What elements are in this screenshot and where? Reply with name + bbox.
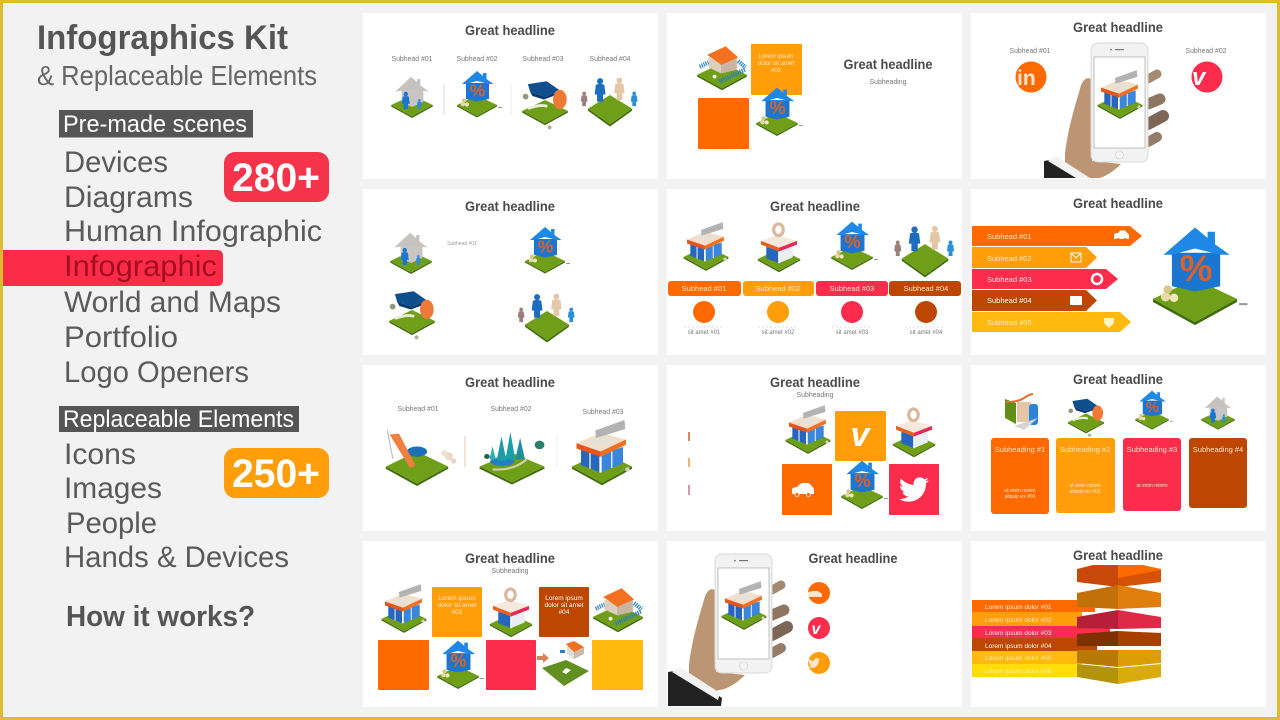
panel: slide row 1 column 1: Subhead #04 — [590, 54, 630, 63]
stacked bars: Lorem ipsum dolor #05 — [985, 655, 1052, 662]
list: replaceable elements — [64, 438, 289, 574]
arrow 3 with lifebuoy icon: Subhead #03 — [987, 275, 1032, 284]
list: replaceable elements: Hands & Devices — [64, 541, 289, 574]
scene: percent house — [831, 222, 878, 270]
panel: slide row 3 column 2 — [667, 365, 962, 531]
panel: slide row 4 column 1 — [363, 541, 658, 707]
scene: percent house — [525, 227, 570, 274]
panel: slide row 3 column 1: Great headline — [465, 374, 555, 390]
icon: vimeo circle: v — [812, 621, 822, 638]
badge: 250+: 250+ — [232, 452, 320, 496]
badge: 280+: 280+ — [232, 156, 320, 200]
card 1: aliquip ex #01 — [1005, 494, 1036, 500]
list: pre-made scenes: Portfolio — [64, 321, 178, 354]
stacked bars: Lorem ipsum dolor #04 — [985, 643, 1052, 650]
scene: shop — [572, 420, 632, 485]
tile: brown: dolor sit amet — [544, 602, 584, 609]
scene: shop — [786, 405, 830, 454]
stacked bars: Lorem ipsum dolor #03 — [985, 630, 1052, 637]
panel: slide row 1 column 2 — [667, 13, 962, 179]
column bars — [668, 281, 961, 296]
tile: twitter — [889, 464, 939, 515]
how it works link: How it works? — [66, 601, 255, 633]
tile: orange — [378, 640, 429, 690]
heading: pre-made scenes: Pre-made scenes — [63, 111, 247, 138]
arrow 4 with picture icon — [972, 290, 1097, 311]
phone in hand — [1044, 43, 1163, 195]
arrow 1 with car icon — [972, 226, 1142, 246]
card 3: Subheading #3 — [1127, 445, 1177, 454]
stacked bars — [972, 600, 1110, 677]
scene: people — [518, 294, 575, 342]
icon: linkedin circle — [1016, 62, 1046, 92]
list: pre-made scenes: Diagrams — [64, 181, 193, 214]
list: pre-made scenes: Devices — [64, 146, 168, 179]
scene: percent house — [1135, 391, 1173, 430]
icon: twitter circle — [808, 652, 830, 674]
list: pre-made scenes — [64, 146, 322, 389]
panel: slide row 3 column 3: Great headline — [1073, 371, 1163, 387]
stacked bars: Lorem ipsum dolor #02 — [985, 617, 1052, 624]
panel: slide row 4 column 2 — [667, 541, 962, 707]
panel: slide row 1 column 1 — [363, 13, 658, 179]
tile: amber: dolor sit amet — [437, 602, 477, 609]
square: amber: dolor sit amet — [758, 61, 794, 67]
panel: slide row 1 column 2: Subheading — [870, 77, 906, 86]
icon: vimeo circle — [1192, 62, 1222, 92]
panel: slide row 4 column 1: Subheading — [492, 566, 528, 575]
column captions: sit amet #02 — [762, 330, 795, 336]
scene: percent house — [841, 461, 888, 509]
tile: amber: Lorem ipsum — [438, 595, 476, 602]
panel: slide row 2 column 1: Great headline — [465, 198, 555, 214]
panel: slide row 2 column 1: Subhead #01 — [447, 241, 477, 247]
scene: shop — [382, 584, 426, 633]
panel: slide row 1 column 3: Subhead #01 — [1010, 46, 1050, 55]
card 1: Subheading #1 — [995, 445, 1045, 454]
square: amber: #02 — [771, 68, 782, 74]
column captions: sit amet #03 — [836, 330, 869, 336]
scene: percent house — [437, 641, 484, 689]
tile: car — [782, 464, 832, 515]
subtitle: & Replaceable Elements — [37, 60, 317, 91]
list: pre-made scenes: Logo Openers — [64, 356, 249, 389]
arrow 4 with picture icon: Subhead #04 — [987, 296, 1032, 305]
panel: slide row 1 column 3: Subhead #02 — [1186, 46, 1226, 55]
arrow 2 with envelope icon — [972, 247, 1097, 268]
panel: slide row 4 column 3: Great headline — [1073, 547, 1163, 563]
card 3: ut enim minim — [1136, 483, 1168, 489]
panel: slide row 2 column 1 — [363, 189, 658, 355]
panel: slide row 1 column 1: Great headline — [465, 22, 555, 38]
panel: slide row 1 column 1: Subhead #03 — [522, 54, 564, 63]
scene: house lot — [542, 641, 589, 686]
panel: slide row 2 column 2 — [667, 189, 962, 355]
scene: cottage — [593, 588, 643, 632]
scene: park — [480, 432, 544, 485]
card 1 — [991, 438, 1049, 514]
card 3 — [1123, 438, 1181, 511]
stacked bars: Lorem ipsum dolor #06 — [985, 668, 1052, 675]
scene: cottage — [697, 46, 747, 90]
square: orange — [698, 98, 749, 149]
panel: slide row 2 column 2: Great headline — [770, 198, 860, 214]
arrow 2 with envelope icon: Subhead #02 — [987, 254, 1032, 263]
list: replaceable elements: People — [66, 507, 157, 540]
arrow — [537, 653, 549, 663]
prism stack — [1077, 565, 1161, 684]
column bars: Subhead #04 — [904, 284, 948, 293]
tile: vimeo: v — [851, 416, 872, 454]
tile: brown: Lorem ipsum — [545, 595, 583, 602]
scene: people — [581, 78, 638, 126]
panel: slide row 1 column 3: Great headline — [1073, 19, 1163, 35]
panel: sidebar — [3, 19, 329, 633]
panel: slide row 3 column 3 — [971, 365, 1266, 531]
tile: vimeo — [835, 411, 886, 461]
icon: car circle — [808, 582, 830, 604]
scene: donut shop — [758, 224, 800, 272]
panel: slide row 4 column 3 — [971, 541, 1266, 707]
card 4 — [1189, 438, 1247, 508]
column captions — [684, 327, 945, 336]
list: pre-made scenes: World and Maps — [64, 286, 281, 319]
panel: slide row 1 column 2: Great headline — [844, 56, 933, 72]
card 2: aliquip ex #02 — [1070, 489, 1101, 495]
column bars: Subhead #02 — [756, 284, 800, 293]
square: amber — [751, 44, 802, 95]
list: replaceable elements: Images — [64, 472, 162, 505]
tile: yellow — [592, 640, 643, 690]
panel: slide row 2 column 3 — [971, 189, 1266, 355]
square: amber: Lorem ipsum — [759, 54, 793, 60]
tile: amber: #02 — [452, 609, 463, 616]
tile: red — [486, 640, 536, 690]
column bars: Subhead #03 — [830, 284, 874, 293]
scene: tent — [1068, 399, 1104, 437]
panel: slide row 3 column 2: Subheading — [796, 390, 834, 399]
scene: chart — [1005, 394, 1038, 430]
list: replaceable elements: Icons — [64, 438, 136, 471]
scene: percent house — [756, 88, 803, 136]
scene: grey house — [1201, 396, 1235, 430]
column captions: sit amet #04 — [910, 330, 943, 336]
scene: donut shop — [490, 589, 532, 637]
scene: tent — [389, 291, 435, 339]
tile: brown — [539, 587, 589, 637]
list: pre-made scenes: Infographic — [64, 250, 217, 283]
scene: large percent house — [1153, 228, 1248, 325]
scene: shop — [684, 222, 728, 271]
arrow 3 with lifebuoy icon — [972, 269, 1118, 289]
panel: slide row 3 column 1: Subhead #03 — [582, 407, 624, 416]
column captions: sit amet #01 — [688, 330, 721, 336]
icon: vimeo circle — [808, 617, 830, 639]
panel: slide row 4 column 1: Great headline — [465, 550, 555, 566]
scene: grey house — [390, 233, 432, 274]
panel: slide row 3 column 1: Subhead #01 — [398, 404, 438, 413]
panel: slide row 3 column 1 — [363, 365, 658, 531]
heading: replaceable elements: Replaceable Elements — [63, 406, 294, 433]
panel: slide row 3 column 2: Great headline — [770, 374, 860, 390]
list: pre-made scenes: Human Infographic — [64, 215, 322, 248]
phone in hand — [668, 554, 787, 706]
scene: people — [894, 226, 954, 277]
stacked bars: Lorem ipsum dolor #01 — [985, 604, 1052, 611]
scene: percent house — [457, 71, 502, 118]
scene: playground — [386, 431, 456, 486]
column circles — [693, 301, 937, 323]
card 2 — [1056, 438, 1115, 513]
panel: slide row 1 column 1: Subhead #01 — [392, 54, 432, 63]
tile: amber — [432, 587, 482, 637]
arrow 5 with shield icon: Subhead #05 — [987, 318, 1032, 327]
card 2: Subheading #2 — [1060, 445, 1110, 454]
panel: slide row 2 column 3: Great headline — [1073, 195, 1163, 211]
scene: grey house — [391, 77, 433, 118]
panel: slide row 1 column 3 — [971, 13, 1266, 195]
card 4: Subheading #4 — [1193, 445, 1243, 454]
card 2: ut enim minim — [1069, 483, 1101, 489]
panel: slide row 3 column 1: Subhead #02 — [490, 404, 532, 413]
icon: vimeo circle: v — [1192, 64, 1207, 91]
tile: brown: #04 — [559, 609, 570, 616]
bullet markers — [688, 432, 690, 495]
column bars: Subhead #01 — [682, 284, 726, 293]
arrow 1 with car icon: Subhead #01 — [987, 232, 1032, 241]
highlight bar — [3, 250, 223, 286]
card 1: ut enim minim — [1004, 488, 1036, 494]
scene: tent — [522, 81, 568, 129]
scene: donut shop — [893, 409, 935, 457]
panel: slide row 1 column 1: Subhead #02 — [456, 54, 498, 63]
arrow 5 with shield icon — [972, 312, 1131, 332]
icon: linkedin circle: in — [1017, 67, 1036, 90]
panel: slide row 4 column 2: Great headline — [808, 550, 898, 566]
title: Infographics Kit — [37, 19, 288, 57]
